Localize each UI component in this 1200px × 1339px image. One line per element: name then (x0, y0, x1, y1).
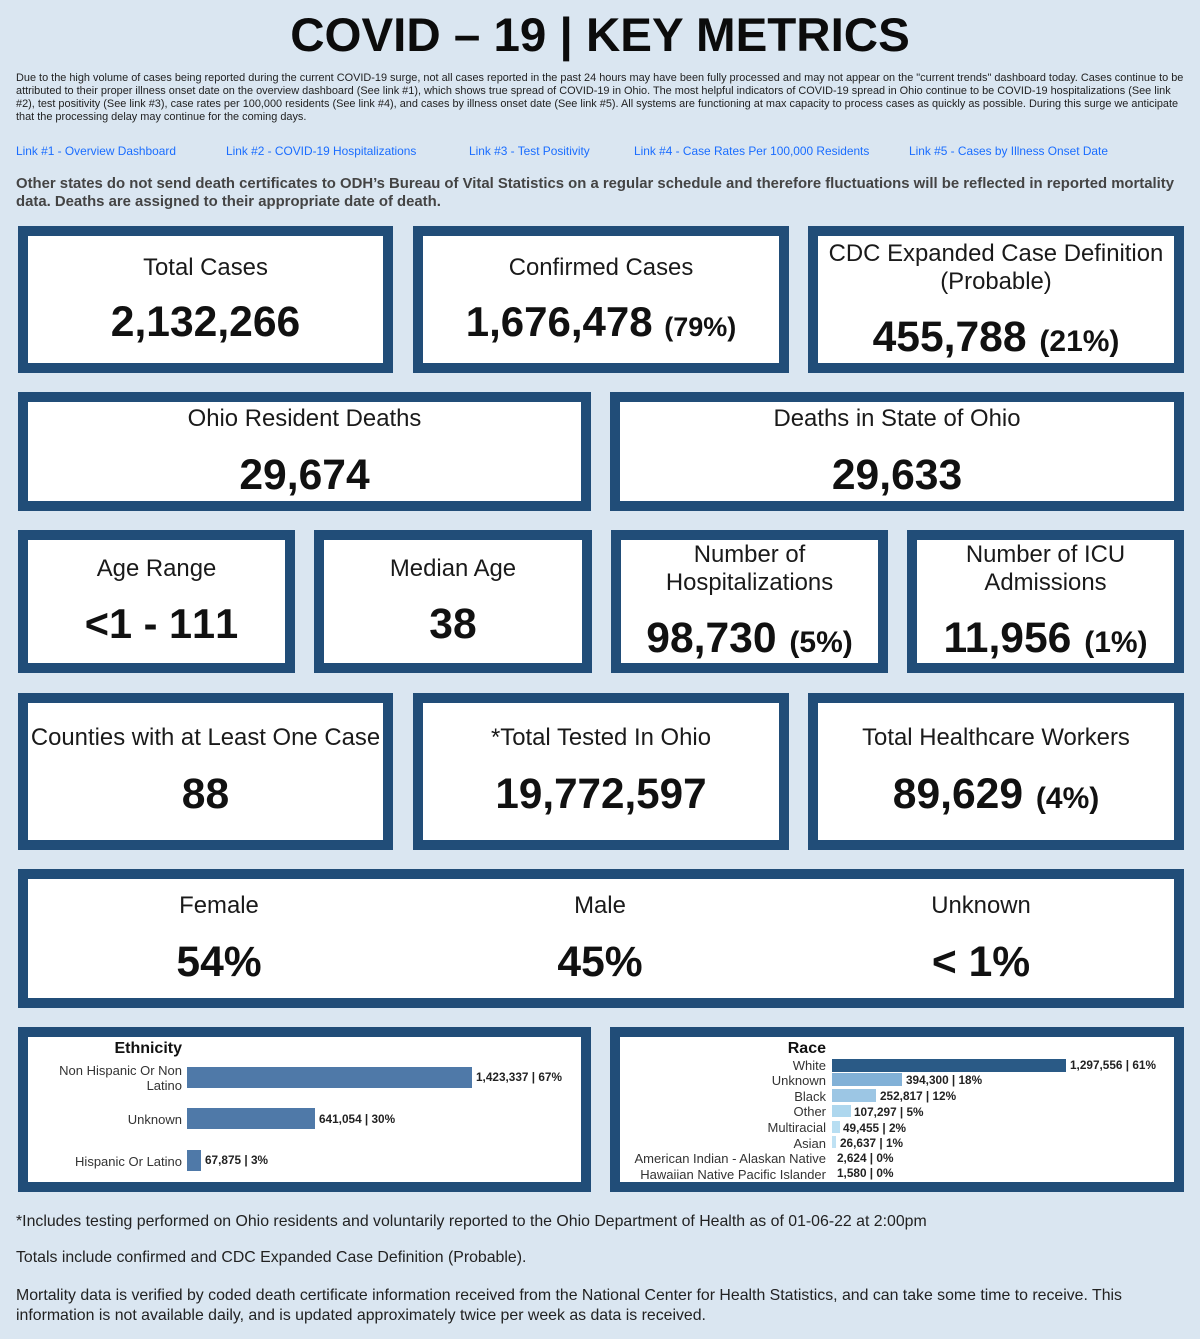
panel: race chart: 1,580 | 0% (837, 1166, 893, 1180)
intro paragraph: attributed to their proper illness onset date on the overview dashboard (See link #1), which shows true spread of COVID-19 in Ohio. The most helpful indicators of COVID-19 spread in Ohio continue to be COVID-19 hospitalizations (See link (16, 85, 1171, 97)
counties label: Counties with at Least One Case (31, 724, 380, 751)
female (176, 892, 262, 986)
panel: healthcare workers (808, 693, 1184, 850)
race labels: Other (793, 1104, 826, 1119)
panel: race chart: 26,637 | 1% (840, 1136, 903, 1150)
total tested label: *Total Tested In Ohio (491, 724, 711, 751)
race labels (634, 1058, 826, 1182)
panel: ethnicity chart (18, 1027, 591, 1192)
hospitalizations label: Hospitalizations (666, 569, 833, 596)
unknown: Unknown (931, 892, 1031, 919)
panel: race chart: 252,817 | 12% (880, 1089, 956, 1103)
total cases label: Total Cases (143, 254, 268, 281)
race bars (832, 1059, 1066, 1148)
links row (16, 144, 1108, 158)
links row: Link #2 - COVID-19 Hospitalizations (226, 144, 416, 158)
counties value: 88 (182, 770, 229, 818)
icu admissions value: 11,956 (1%) (943, 614, 1148, 662)
mortality note: Other states do not send death certificates to ODH’s Bureau of Vital Statistics on a regular schedule and therefore fluctuations will be reflected in reported mortality (16, 176, 1174, 192)
icu admissions label: Number of ICU (966, 541, 1125, 568)
panel: counties (18, 693, 393, 850)
probable cases label (829, 240, 1163, 295)
mortality note: data. Deaths are assigned to their appropriate date of death. (16, 194, 441, 210)
panel: age range (18, 530, 295, 673)
healthcare workers value: 89,629 (4%) (893, 770, 1099, 818)
panel: deaths in state of ohio (610, 392, 1184, 511)
female: Female (179, 892, 259, 919)
probable cases value: 455,788 (21%) (873, 313, 1119, 361)
footnotes (16, 1213, 1122, 1324)
race labels: American Indian - Alaskan Native (635, 1151, 826, 1166)
female: 54% (176, 938, 262, 986)
ethnicity labels: Latino (147, 1078, 182, 1093)
hospitalizations label (666, 541, 833, 596)
panel: ethnicity chart: 641,054 | 30% (319, 1112, 395, 1126)
panel: sex breakdown (18, 869, 1184, 1008)
total tested value: 19,772,597 (495, 770, 707, 817)
unknown (931, 892, 1031, 986)
confirmed cases label: Confirmed Cases (509, 254, 693, 281)
ethnicity values: 1,423,337 | 67% (476, 1070, 562, 1084)
ethnicity labels (59, 1063, 182, 1169)
race labels: Hawaiian Native Pacific Islander (640, 1167, 826, 1182)
panel: hospitalizations (611, 530, 888, 673)
panel: ethnicity chart: 67,875 | 3% (205, 1153, 268, 1167)
race labels: Multiracial (767, 1120, 826, 1135)
panel: total cases (18, 226, 393, 373)
footnotes: information is not available daily, and is updated approximately twice per week as data is received. (16, 1307, 706, 1324)
mortality note (16, 176, 1174, 210)
race heading: Race (788, 1040, 826, 1057)
race values: 1,297,556 | 61% (1070, 1058, 1156, 1072)
links row: Link #4 - Case Rates Per 100,000 Residents (634, 144, 869, 158)
race labels: Unknown (772, 1073, 826, 1088)
confirmed cases value: 1,676,478 (79%) (466, 298, 736, 345)
intro paragraph (16, 72, 1183, 123)
title: COVID – 19 | KEY METRICS (290, 9, 910, 62)
probable cases label: CDC Expanded Case Definition (829, 240, 1163, 267)
icu admissions label: Admissions (984, 569, 1107, 596)
state deaths value: 29,633 (832, 451, 962, 499)
links row: Link #3 - Test Positivity (469, 144, 590, 158)
ethnicity labels: Hispanic Or Latino (75, 1154, 182, 1169)
total cases value: 2,132,266 (111, 298, 300, 346)
ethnicity bars (187, 1067, 472, 1171)
male: 45% (557, 938, 643, 986)
age range label: Age Range (97, 555, 216, 582)
panel: ohio resident deaths (18, 392, 591, 511)
icu admissions label (966, 541, 1125, 596)
race labels: White (793, 1058, 826, 1073)
panel: race chart: 394,300 | 18% (906, 1073, 982, 1087)
hospitalizations value: 98,730 (5%) (646, 614, 853, 662)
panel: race chart: 2,624 | 0% (837, 1151, 893, 1165)
panel: race chart (610, 1027, 1184, 1192)
unknown: < 1% (932, 938, 1030, 986)
links row: Link #5 - Cases by Illness Onset Date (909, 144, 1108, 158)
panel: race chart: 49,455 | 2% (843, 1121, 906, 1135)
panel: icu admissions (907, 530, 1184, 673)
intro paragraph: that the processing delay may continue for the coming days. (16, 111, 306, 123)
intro paragraph: Due to the high volume of cases being reported during the current COVID-19 surge, not all cases reported in the past 24 hours may have been fully processed and may not appear on the "current trends" dashboard today. Cases continue to be (16, 72, 1183, 84)
age range value: <1 - 111 (85, 600, 238, 647)
resident deaths label: Ohio Resident Deaths (188, 405, 421, 432)
median age label: Median Age (390, 555, 516, 582)
race labels: Asian (793, 1136, 826, 1151)
panel: probable cases (808, 226, 1184, 373)
resident deaths value: 29,674 (239, 451, 370, 499)
male: Male (574, 892, 626, 919)
panel: total tested (413, 693, 789, 850)
footnotes: Mortality data is verified by coded death certificate information received from the National Center for Health Statistics, and can take some time to receive. This (16, 1287, 1122, 1304)
male (557, 892, 643, 986)
ethnicity labels: Unknown (128, 1112, 182, 1127)
panel: median age (314, 530, 592, 673)
footnotes: *Includes testing performed on Ohio residents and voluntarily reported to the Ohio Department of Health as of 01-06-22 at 2:00pm (16, 1213, 927, 1230)
footnotes: Totals include confirmed and CDC Expanded Case Definition (Probable). (16, 1249, 526, 1266)
panel: confirmed cases (413, 226, 789, 373)
race labels: Black (794, 1089, 826, 1104)
median age value: 38 (429, 600, 477, 648)
intro paragraph: #2), test positivity (See link #3), case rates per 100,000 residents (See link #4), and cases by illness onset date (See link #5). All systems are functioning at max capacity to process cases as quickly as possible. During this surge we anticipate (16, 98, 1178, 110)
probable cases label: (Probable) (940, 268, 1052, 295)
hospitalizations label: Number of (694, 541, 805, 568)
links row: Link #1 - Overview Dashboard (16, 144, 176, 158)
state deaths label: Deaths in State of Ohio (773, 405, 1020, 432)
panel: race chart: 107,297 | 5% (854, 1105, 924, 1119)
healthcare workers label: Total Healthcare Workers (862, 724, 1130, 751)
ethnicity heading: Ethnicity (114, 1040, 182, 1057)
ethnicity labels: Non Hispanic Or Non (59, 1063, 182, 1078)
